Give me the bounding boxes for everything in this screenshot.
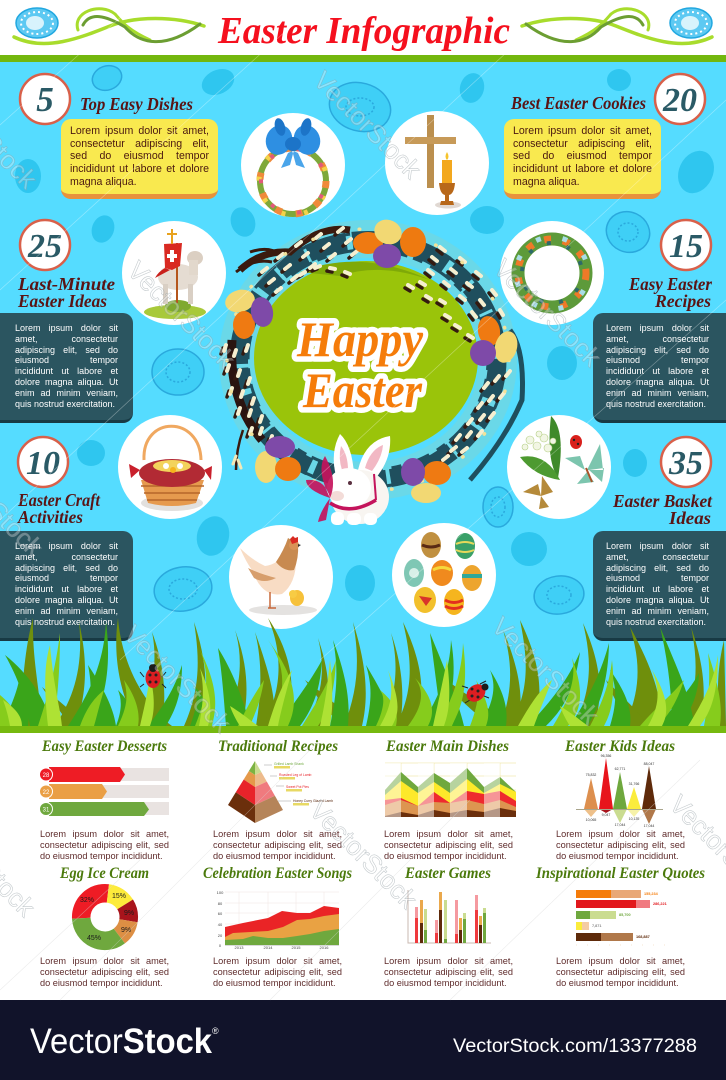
heading: last-minute easter ideas: Easter Ideas	[17, 291, 107, 311]
heading: easter main dishes: Easter Main Dishes	[385, 738, 509, 755]
footer bar	[0, 1000, 726, 1080]
text block: right upper: incididunt ut labore et	[606, 366, 709, 376]
chart: pyramid: Grilled Lamb Shank	[274, 762, 304, 766]
icon: lamb with banner	[122, 221, 226, 325]
text block: left upper: adipiscing elit, sed do	[15, 345, 118, 355]
top green band	[0, 55, 726, 62]
chart: triangle peaks	[576, 754, 663, 828]
heading: easy easter recipes: Recipes	[654, 291, 711, 311]
ladybug left	[140, 664, 166, 688]
text block: left lower: dolore magna aliqua. Ut	[15, 595, 118, 605]
text block: top left note: sed do eiusmod tempor	[70, 150, 209, 162]
chart: layered area chart	[385, 763, 516, 817]
chart: grouped bars	[408, 890, 491, 943]
icon: painted eggs	[392, 523, 496, 627]
patterned eggs	[89, 62, 656, 617]
text block: quotes: consectetur adipiscing elit, sed	[556, 967, 685, 977]
text block: top left note: incididunt ut labore et dolore	[70, 163, 209, 175]
text block: ice cream: do eiusmod tempor incididunt.	[40, 978, 163, 988]
text block: right lower: adipiscing elit, sed do	[606, 563, 709, 573]
text block: desserts: Lorem ipsum dolor sit amet,	[40, 829, 169, 839]
watermark overlay: VectorStock	[304, 795, 424, 915]
footer bar: VectorStock.com/13377288	[453, 1036, 697, 1057]
number badge 35: 35	[668, 445, 703, 482]
text block: top left note: Lorem ipsum dolor sit amet,	[70, 125, 209, 137]
text block: songs: do eiusmod tempor incididunt.	[213, 978, 336, 988]
chart: stacked area: 2014	[264, 945, 273, 950]
chart: donut: 9%	[121, 927, 131, 934]
text block: quotes	[556, 956, 685, 988]
text block: right upper: dolore magna aliqua. Ut	[606, 377, 709, 387]
heading: traditional recipes: Traditional Recipes	[218, 738, 338, 755]
panel: dark note right upper	[593, 313, 726, 423]
icon: header egg right	[670, 8, 712, 38]
text block: top left note: magna aliqua.	[70, 176, 137, 188]
text block: recipes: Lorem ipsum dolor sit amet,	[213, 829, 342, 839]
chart: triangle peaks: 62,771	[615, 767, 625, 771]
text block: recipes	[213, 829, 342, 861]
heading: easter craft activities: Activities	[17, 507, 83, 527]
panel: dark note right lower	[593, 531, 726, 641]
text block: top right note: sed do eiusmod tempor	[513, 150, 652, 162]
chart: triangle peaks: 17,044	[615, 823, 625, 827]
text block: left upper: Lorem ipsum dolor sit	[15, 323, 118, 333]
text block: kids ideas: Lorem ipsum dolor sit amet,	[556, 829, 685, 839]
number badge 5	[20, 74, 70, 124]
text block: right lower: incididunt ut labore et	[606, 584, 709, 594]
grass light blades	[0, 633, 721, 726]
text block: top right note	[513, 125, 652, 188]
watermark overlay: VectorStock	[122, 255, 242, 375]
chart: horizontal stacked bars: 155,234	[644, 892, 659, 896]
chart: stacked area: 40	[218, 922, 223, 927]
icon: header swirl left	[14, 9, 204, 44]
heading: easter basket ideas	[612, 491, 713, 528]
text block: games: do eiusmod tempor incididunt.	[384, 978, 507, 988]
heading: easter craft activities: Easter Craft	[17, 490, 101, 510]
text block: games	[384, 956, 513, 988]
chart: progress arrows: 22	[43, 790, 50, 796]
chart: stacked area: 0	[219, 943, 222, 948]
text block: ice cream	[40, 956, 169, 988]
heading: last-minute easter ideas	[17, 274, 115, 311]
egg cluster right	[470, 314, 521, 366]
icon: wreath with blue bow	[241, 113, 345, 217]
heading: inspirational easter quotes: Inspirational Easter Quotes	[535, 865, 705, 882]
egg cluster bottom left	[255, 436, 301, 483]
chart: stacked area: 2015	[292, 945, 301, 950]
text block: ice cream: consectetur adipiscing elit, sed	[40, 967, 169, 977]
watermark overlay: VectorStock	[308, 65, 428, 185]
icon: white easter rabbit	[306, 434, 390, 525]
grass mid blades	[2, 622, 699, 726]
panel: yellow note top right	[504, 119, 661, 199]
text block: right lower: amet, consectetur	[606, 552, 709, 562]
text block: left upper	[15, 323, 118, 409]
text block: left upper: incididunt ut labore et	[15, 366, 118, 376]
chart: donut: 15%	[112, 893, 126, 900]
text block: right lower: dolore magna aliqua. Ut	[606, 595, 709, 605]
text block: quotes: Lorem ipsum dolor sit amet,	[556, 956, 685, 966]
text block: top left note: consectetur adipiscing elit,	[70, 138, 209, 150]
footer bar: ®	[212, 1026, 219, 1036]
text block: left upper: eiusmod tempor	[15, 355, 118, 365]
chart: stacked area	[217, 890, 339, 950]
text block: left upper: enim ad minim veniam,	[15, 388, 118, 398]
wreath with eggs	[221, 215, 522, 503]
text block: right lower: quis nostrud exercitation.	[606, 617, 706, 627]
heading: easy easter recipes: Easy Easter	[628, 274, 713, 294]
title: Easter Infographic	[217, 10, 510, 52]
chart: horizontal stacked bars: 85,700	[619, 913, 631, 917]
text block: right lower: Lorem ipsum dolor sit	[606, 541, 709, 551]
icon: cross and candle	[385, 111, 489, 215]
heading: easter kids ideas: Easter Kids Ideas	[564, 738, 675, 755]
text block: left lower: quis nostrud exercitation.	[15, 617, 115, 627]
text block: right lower: enim ad minim veniam,	[606, 606, 709, 616]
heading: top easy dishes: Top Easy Dishes	[80, 94, 193, 114]
text block: desserts: consectetur adipiscing elit, sed	[40, 840, 169, 850]
egg cluster top	[353, 215, 426, 268]
text block: quotes: do eiusmod tempor incididunt.	[556, 978, 679, 988]
number badge 35	[661, 437, 711, 487]
footer bar: VectorStock	[30, 1022, 212, 1061]
heading: happy easter: Happy	[296, 311, 424, 367]
heading: easter basket ideas: Ideas	[668, 508, 711, 528]
text block: left lower: incididunt ut labore et	[15, 584, 118, 594]
text block: right upper	[606, 323, 709, 409]
panel: dark note left lower	[0, 531, 133, 641]
heading: celebration easter songs: Celebration Easter Songs	[203, 865, 352, 882]
text block: left upper: quis nostrud exercitation.	[15, 399, 115, 409]
grass back blades	[18, 618, 726, 726]
text block: top right note: consectetur adipiscing elit,	[513, 138, 652, 150]
chart: triangle peaks: 88,047	[644, 762, 654, 766]
chart: triangle peaks: 9,047	[602, 813, 610, 817]
watermark overlay: VectorStock	[486, 611, 606, 731]
text block: recipes: consectetur adipiscing elit, sed	[213, 840, 342, 850]
chart: triangle peaks: 17,044	[644, 824, 654, 828]
catkin buds cream	[224, 228, 510, 460]
chart: progress arrows: 31	[43, 808, 50, 814]
heading: easy easter desserts: Easy Easter Desserts	[41, 738, 167, 755]
chart: donut: 32%	[80, 897, 94, 904]
icon: hen and chick	[229, 525, 333, 629]
text block: songs	[213, 956, 342, 988]
chart: stacked area: 80	[218, 901, 223, 906]
number badge 25: 25	[27, 228, 62, 265]
text block: right upper: Lorem ipsum dolor sit	[606, 323, 709, 333]
text block: left lower: eiusmod tempor	[15, 573, 118, 583]
text block: right upper: amet, consectetur	[606, 334, 709, 344]
text block: games: consectetur adipiscing elit, sed	[384, 967, 513, 977]
icon: header swirl right	[522, 9, 712, 44]
text block: songs: consectetur adipiscing elit, sed	[213, 967, 342, 977]
panel: yellow note top left	[61, 119, 218, 199]
heading: last-minute easter ideas: Last-Minute	[17, 274, 115, 294]
number badge 25	[20, 220, 70, 270]
text block: main dishes	[384, 829, 513, 861]
text block: left upper: amet, consectetur	[15, 334, 118, 344]
lower green band	[0, 726, 726, 733]
chart: pyramid: Roasted Leg of Lamb	[279, 773, 312, 777]
heading: happy easter	[296, 311, 424, 418]
text block: left lower: Lorem ipsum dolor sit	[15, 541, 118, 551]
heading: egg ice cream: Egg Ice Cream	[59, 865, 149, 882]
number badge 10	[18, 437, 68, 487]
ladybug right	[462, 681, 489, 705]
heading: best easter cookies: Best Easter Cookies	[510, 93, 646, 113]
text block: top right note: magna aliqua.	[513, 176, 580, 188]
number badge 20: 20	[662, 82, 697, 119]
text block: right lower	[606, 541, 709, 627]
text block: right upper: enim ad minim veniam,	[606, 388, 709, 398]
chart: donut: 45%	[87, 935, 101, 942]
background eggs	[15, 64, 721, 601]
heading: easy easter recipes	[628, 274, 713, 311]
blue panel background	[0, 60, 726, 728]
chart: stacked area: 2013	[235, 945, 244, 950]
chart: triangle peaks: 10,065	[586, 818, 596, 822]
text block: ice cream: Lorem ipsum dolor sit amet,	[40, 956, 169, 966]
chart: donut	[72, 884, 138, 950]
text block: kids ideas: do eiusmod tempor incididunt.	[556, 851, 679, 861]
text block: left lower: enim ad minim veniam,	[15, 606, 118, 616]
number badge 20	[655, 74, 705, 124]
chart: horizontal stacked bars: 286,221	[653, 902, 667, 906]
chart: donut: 9%	[124, 910, 134, 917]
text block: left upper: dolore magna aliqua. Ut	[15, 377, 118, 387]
number badge 15	[661, 220, 711, 270]
text block: kids ideas	[556, 829, 685, 861]
chart: horizontal stacked bars: 7,871	[592, 924, 602, 928]
chart: stacked area: 60	[218, 911, 223, 916]
icon: header egg left	[16, 8, 58, 38]
chart: triangle peaks: 75,832	[586, 773, 596, 777]
chart: pyramid	[228, 761, 333, 823]
text block: right lower: eiusmod tempor	[606, 573, 709, 583]
chart: stacked area: 2016	[320, 945, 329, 950]
text block: main dishes: consectetur adipiscing elit, sed	[384, 840, 513, 850]
chart: stacked area: 20	[218, 933, 223, 938]
text block: right upper: quis nostrud exercitation.	[606, 399, 706, 409]
chart: triangle peaks: 10,135	[629, 817, 639, 821]
heading: easter craft activities	[17, 490, 101, 527]
chart: progress arrows: 28	[43, 773, 50, 779]
text block: main dishes: do eiusmod tempor incididunt.	[384, 851, 507, 861]
number badge 10: 10	[26, 445, 60, 482]
egg cluster bottom right	[401, 458, 451, 503]
heading: easter games: Easter Games	[404, 865, 491, 882]
heading: happy easter: Easter	[302, 362, 422, 418]
text block: top right note: Lorem ipsum dolor sit amet,	[513, 125, 652, 137]
text block: left lower: amet, consectetur	[15, 552, 118, 562]
number badge 5: 5	[36, 80, 54, 119]
chart: triangle peaks: 96,356	[601, 754, 611, 758]
number badge 15: 15	[669, 228, 703, 265]
chart: pyramid: Sweet Pot Pies	[286, 785, 309, 789]
watermark overlay: VectorStock	[118, 619, 238, 739]
text block: games: Lorem ipsum dolor sit amet,	[384, 956, 513, 966]
text block: top right note: incididunt ut labore et dolore	[513, 163, 652, 175]
text block: desserts	[40, 829, 169, 861]
text block: top left note	[70, 125, 209, 188]
text block: songs: Lorem ipsum dolor sit amet,	[213, 956, 342, 966]
heading: easter basket ideas: Easter Basket	[612, 491, 713, 511]
chart: horizontal stacked bars: 168,887	[636, 935, 650, 939]
icon: flower wreath	[500, 221, 604, 325]
text block: kids ideas: consectetur adipiscing elit, sed	[556, 840, 685, 850]
text block: recipes: do eiusmod tempor incididunt.	[213, 851, 336, 861]
chart: triangle peaks: 31,766	[629, 782, 639, 786]
text block: left lower	[15, 541, 118, 627]
chart: horizontal stacked bars	[576, 890, 667, 945]
text block: main dishes: Lorem ipsum dolor sit amet,	[384, 829, 513, 839]
catkin buds dark	[221, 231, 507, 463]
egg cluster left	[223, 286, 275, 339]
icon: lily, ladybug and butterflies	[507, 415, 611, 519]
text block: right upper: adipiscing elit, sed do	[606, 345, 709, 355]
text block: right upper: eiusmod tempor	[606, 355, 709, 365]
grass bright blades	[3, 645, 718, 726]
text block: desserts: do eiusmod tempor incididunt.	[40, 851, 163, 861]
panel: dark note left upper	[0, 313, 133, 423]
watermark overlay: VectorStock	[488, 253, 608, 373]
chart: progress arrows	[40, 767, 169, 816]
chart: stacked area: 100	[217, 890, 224, 895]
icon: easter basket	[118, 415, 222, 519]
chart: pyramid: Honey Curry Glazed Lamb	[293, 799, 333, 803]
text block: left lower: adipiscing elit, sed do	[15, 563, 118, 573]
